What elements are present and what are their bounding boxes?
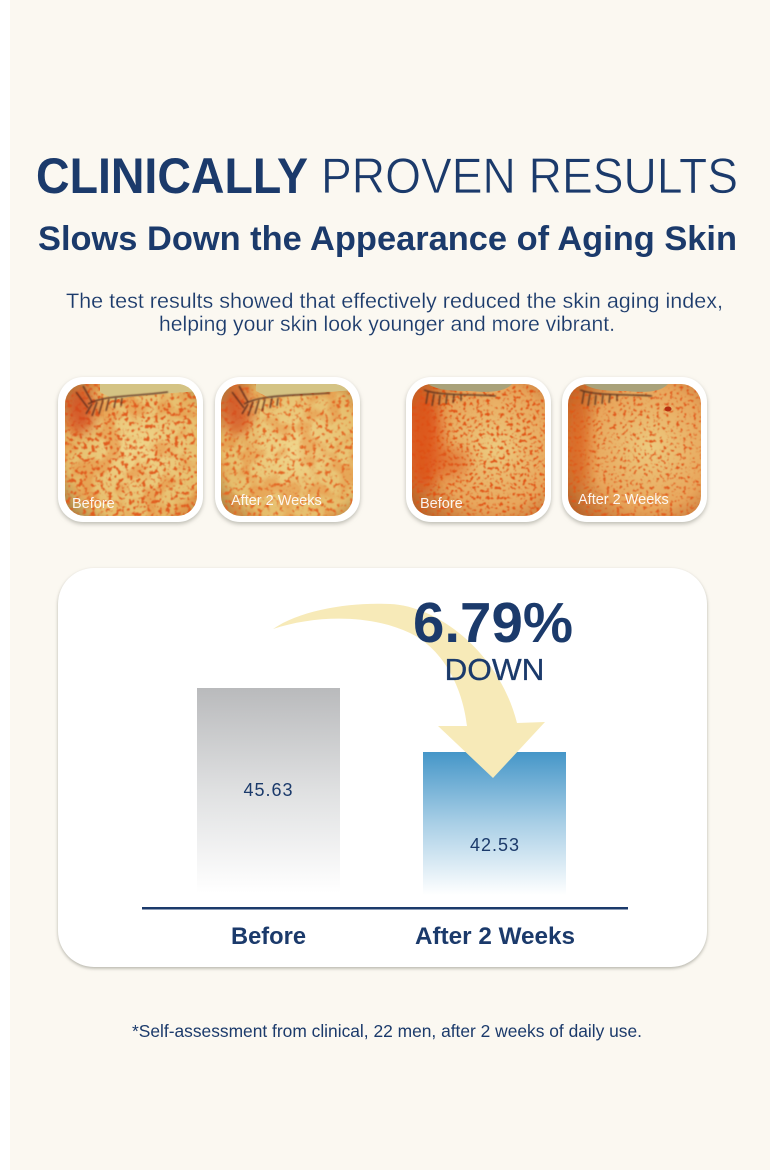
photo card: subject one before: [58, 377, 203, 522]
stat label: DOWN: DOWN: [444, 652, 544, 687]
description text: The test results showed that effectively reduced the skin aging index,: [66, 290, 723, 313]
axis label: After 2 Weeks: After 2 Weeks: [415, 923, 575, 950]
label: Before: Before: [420, 496, 463, 512]
bar: before: [197, 688, 340, 893]
label: Before: Before: [72, 496, 115, 512]
title: PROVEN RESULTS: [321, 148, 738, 204]
subtitle: Slows Down the Appearance of Aging Skin: [38, 220, 737, 258]
value: 45.63: 45.63: [244, 780, 292, 800]
description text: [66, 290, 723, 336]
axis label: Before: Before: [231, 923, 306, 950]
panel: chart: [58, 568, 707, 967]
arrow: curved downward: [273, 604, 545, 778]
footnote: *Self-assessment from clinical, 22 men, after 2 weeks of daily use.: [132, 1021, 642, 1041]
description text: helping your skin look younger and more vibrant.: [159, 313, 615, 336]
value: 42.53: 42.53: [470, 835, 519, 855]
photo card: subject one after: [215, 377, 360, 522]
stat: 6.79%: 6.79%: [413, 591, 573, 655]
title: [36, 148, 738, 204]
label: After 2 Weeks: After 2 Weeks: [231, 493, 322, 509]
photo card: subject two after: [562, 377, 707, 522]
title: CLINICALLY: [36, 148, 308, 204]
bar: after 2 weeks: [423, 752, 566, 895]
axis line: [142, 907, 628, 910]
label: After 2 Weeks: After 2 Weeks: [578, 492, 669, 508]
photo card: subject two before: [406, 377, 551, 522]
